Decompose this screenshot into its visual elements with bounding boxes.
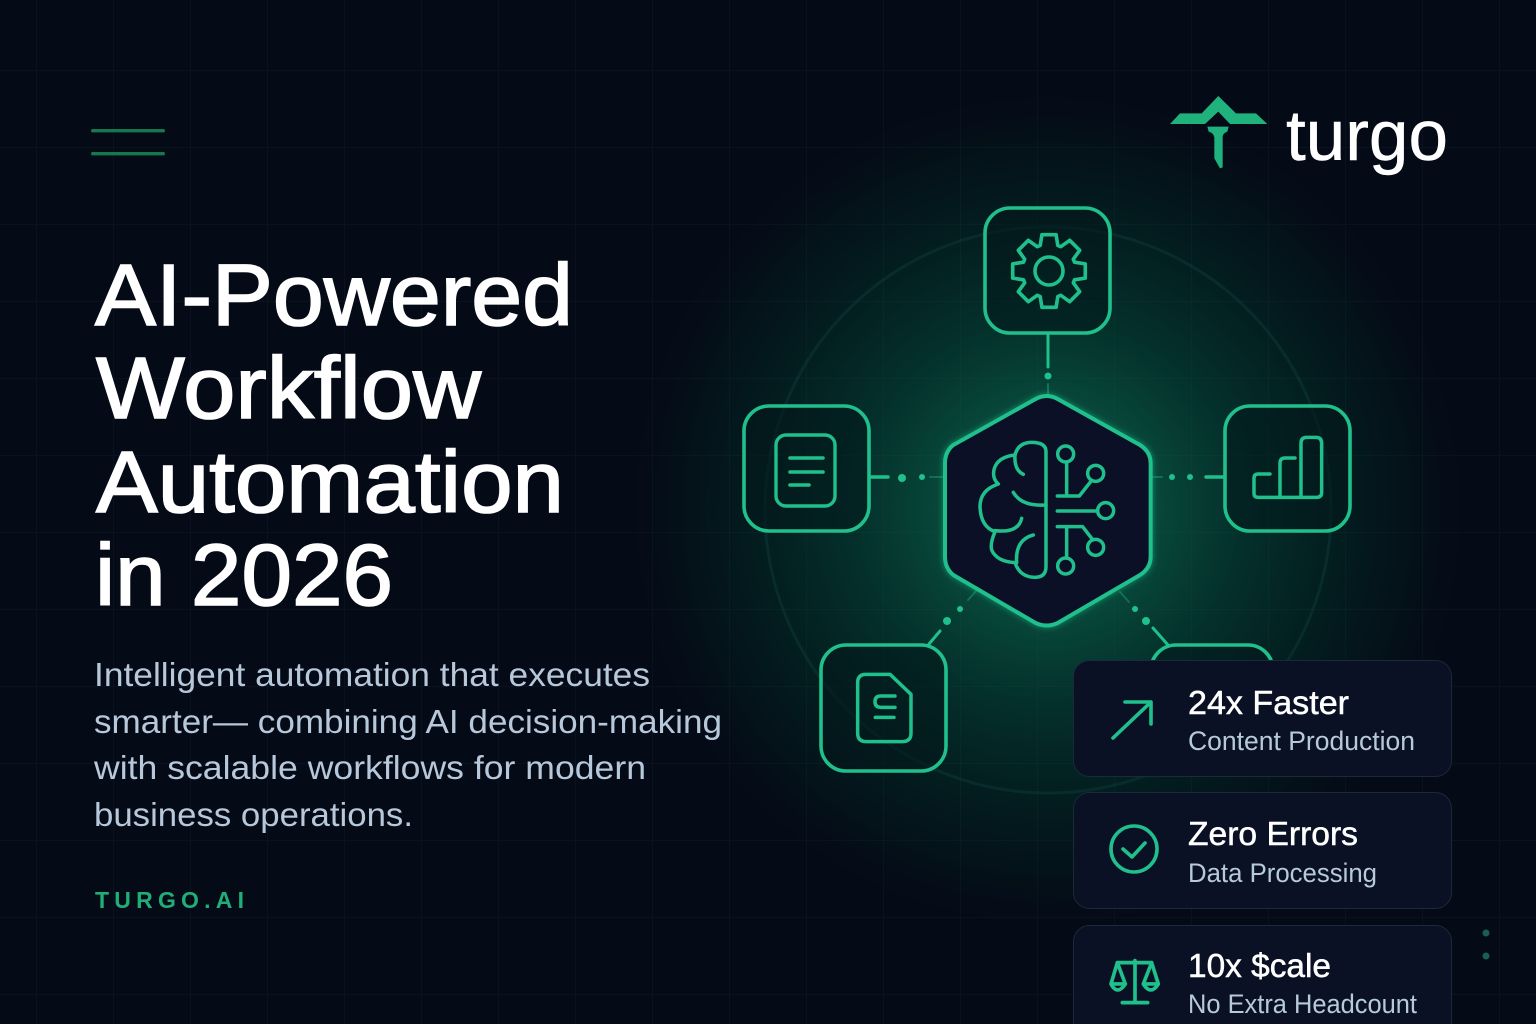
menu lines [91,129,165,155]
icon: bar chart [1254,437,1322,497]
stat card: 10x Scale [1074,926,1452,1024]
title: AI-Powered [95,247,573,344]
title [95,247,573,624]
icon: file [858,674,911,742]
subtitle text block: Intelligent automation that executes [94,656,650,693]
central hexagon with brain icon [945,396,1151,625]
icon: brain [980,442,1046,577]
icon: document lines [776,435,835,506]
icon: arrow up right [1113,702,1151,738]
title: Workflow [96,340,482,437]
connector: left [871,474,944,482]
decorative orbit ring [765,227,1331,793]
connector: bottom left [929,591,976,644]
stat caption: Content Production [1188,726,1415,756]
node: file [821,645,946,771]
stat caption: Data Processing [1188,858,1377,888]
stat title: 10x $cale [1188,947,1331,984]
connector: bottom right [1120,592,1168,645]
node: document [744,406,869,531]
connector: right [1153,474,1223,480]
icon: gear [1013,235,1085,307]
connector: top [1044,335,1052,394]
stat title: 24x Faster [1188,684,1349,721]
logo wordmark: turgo [1286,97,1448,176]
node: bar chart [1225,406,1350,531]
node: hidden behind cards [1151,645,1273,705]
node: settings gear [985,208,1110,333]
logo: turgo [1170,96,1448,176]
icon: circuit traces [1057,446,1114,574]
icon: turgo mark [1170,96,1267,168]
stat card: 24x Faster [1074,660,1452,776]
pagination dots [1482,930,1490,960]
stat card: Zero Errors [1074,792,1452,908]
subtitle text block [93,656,722,833]
stat caption: No Extra Headcount [1188,989,1417,1019]
icon: balance scale [1111,961,1158,1003]
title: in 2026 [95,527,393,624]
subtitle text block: with scalable workflows for modern [93,749,646,786]
website label: TURGO.AI [95,887,244,913]
subtitle text block: business operations. [94,796,413,833]
icon: check circle [1111,826,1157,872]
subtitle text block: smarter— combining AI decision-making [94,703,722,740]
stat title: Zero Errors [1188,815,1358,852]
title: Automation [96,434,564,531]
